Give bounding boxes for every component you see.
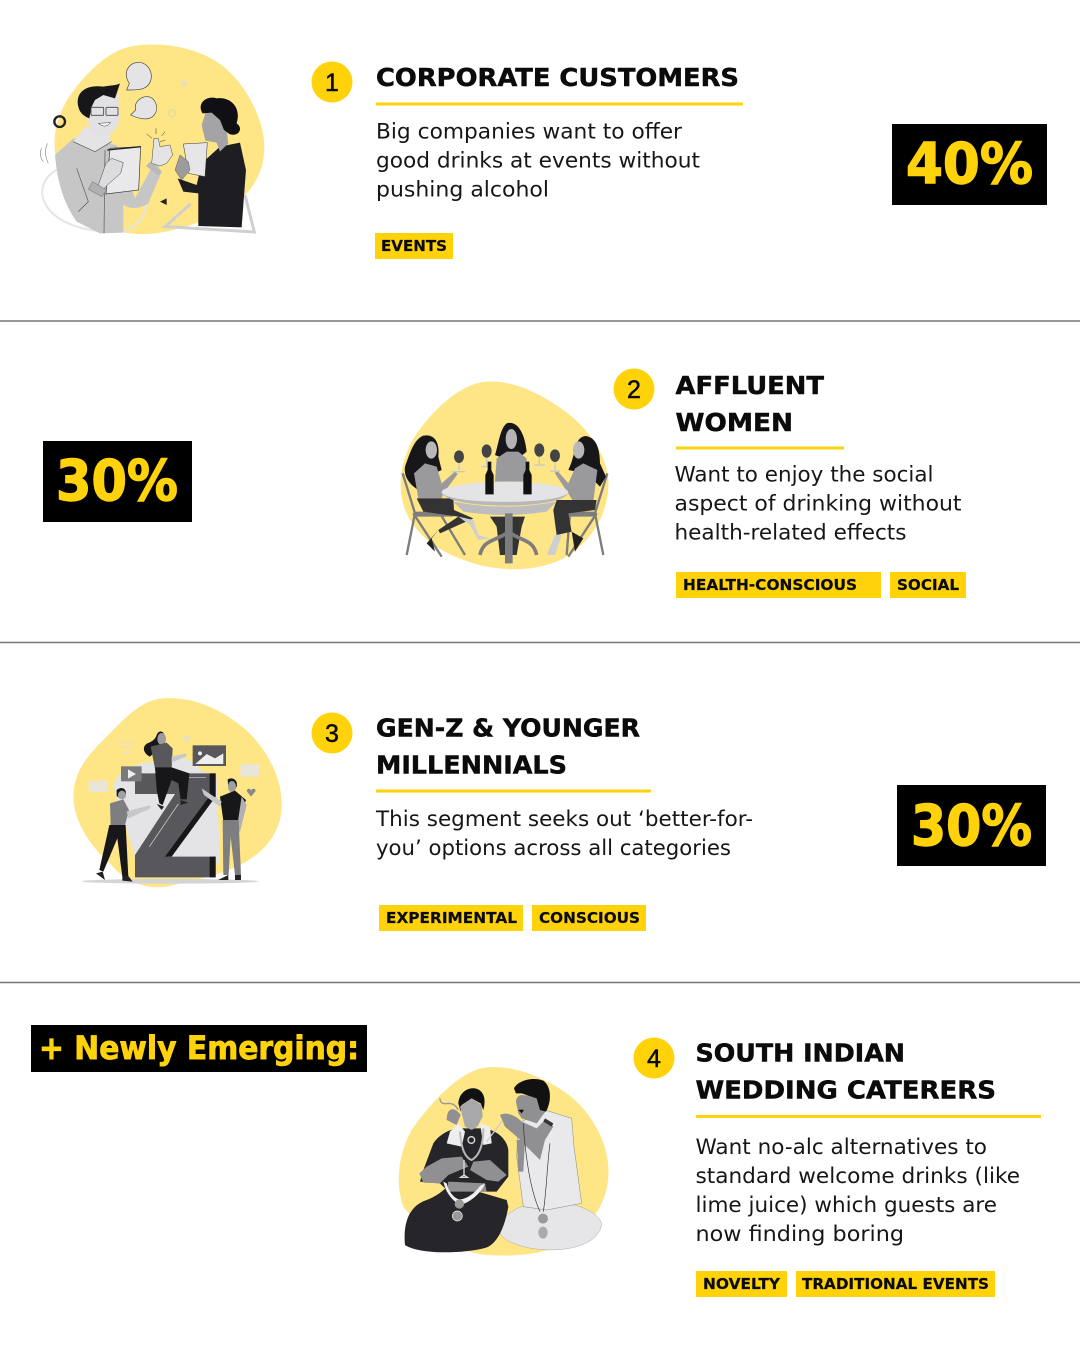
speech bubbles [126,62,151,90]
tag: social: SOCIAL [897,576,959,594]
number badge 4 [634,1038,674,1078]
number badge 1 [312,62,352,102]
number badge 3: 3 [325,720,339,748]
panel: gen-z and younger millennials [73,698,1046,931]
description [696,1135,1020,1246]
tag: conscious [532,905,646,931]
left person [117,788,126,798]
number badge 4: 4 [647,1045,661,1073]
heading [376,714,640,780]
image tile [193,745,226,766]
centre woman [495,423,527,458]
left woman [405,435,442,490]
description: pushing alcohol [376,178,549,202]
video tile [121,766,142,781]
tag: events [375,233,453,259]
bride [447,1109,461,1125]
panel: affluent women [43,368,966,598]
tag: health-conscious [676,572,881,598]
stat: 40% [892,124,1047,205]
tag: experimental: EXPERIMENTAL [386,909,517,927]
tag: traditional events: TRADITIONAL EVENTS [802,1275,989,1293]
description [674,462,962,544]
heading: SOUTH INDIAN [696,1038,905,1068]
illustration: three women at a table [401,382,608,569]
description [376,120,700,202]
tag: social [890,572,966,598]
description: now finding boring [696,1222,904,1246]
callout: newly emerging: + Newly Emerging: [39,1029,359,1067]
glasses [452,453,560,472]
sitting person [144,731,165,757]
tag: conscious: CONSCIOUS [539,909,640,927]
description: lime juice) which guests are [696,1193,997,1217]
number badge 2: 2 [627,376,641,404]
illustration: two colleagues talking [40,44,264,234]
panel: south indian wedding caterers [31,1025,1041,1297]
stat: 40%: 40% [906,132,1033,197]
right person [228,778,237,792]
letter Z [135,773,216,877]
tag: events: EVENTS [381,237,447,255]
tag: experimental [379,905,523,931]
heading: CORPORATE CUSTOMERS [376,63,739,92]
number badge 1: 1 [325,69,339,97]
stat: 30%: 30% [56,449,178,514]
heading [676,371,824,437]
right woman [568,436,606,487]
illustration: wedding couple [399,1067,608,1256]
number badge 2 [614,368,654,410]
groom [500,1202,602,1250]
tag: novelty [696,1271,787,1297]
heading: WOMEN [676,408,793,437]
description: This segment seeks out ‘better-for- [375,807,753,831]
panel: corporate customers [40,44,1047,259]
heading [696,1038,996,1104]
heading: GEN-Z & YOUNGER [376,714,640,742]
description: standard welcome drinks (like [696,1164,1020,1188]
number badge 3 [312,712,352,754]
tag: health-conscious: HEALTH-CONSCIOUS [683,576,857,594]
description: health-related effects [674,520,906,544]
heading: MILLENNIALS [376,750,567,780]
thumb hand [152,138,173,166]
heading: AFFLUENT [676,371,824,400]
description: aspect of drinking without [674,492,962,516]
tag: novelty: NOVELTY [703,1275,781,1293]
bottles [485,462,494,494]
heading: WEDDING CATERERS [696,1076,996,1104]
illustration: people around a letter Z [73,698,282,887]
description: good drinks at events without [376,148,700,172]
woman [178,143,246,227]
man [55,138,162,233]
description [375,807,753,860]
table [442,482,568,503]
chairs [403,473,465,557]
description: you’ options across all categories [376,836,731,860]
description: Want no-alc alternatives to [696,1135,987,1159]
description: Want to enjoy the social [674,462,934,486]
stat: 30%: 30% [911,794,1032,859]
description: Big companies want to offer [376,120,682,144]
tag: traditional events [796,1271,995,1297]
